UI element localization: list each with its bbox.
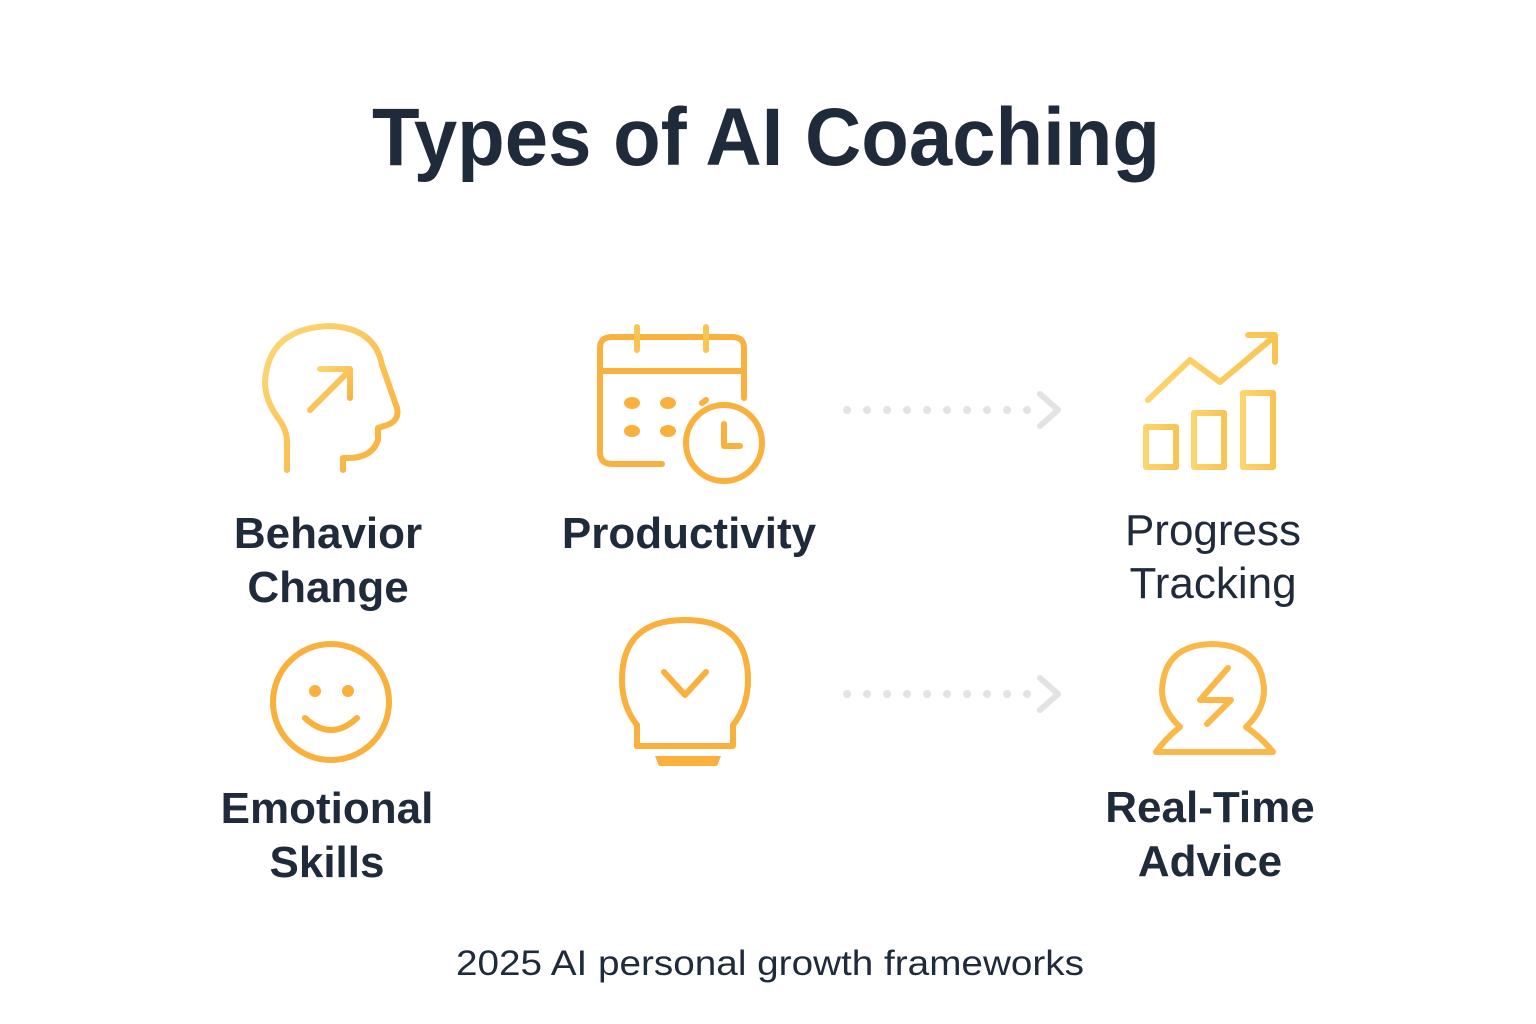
label: Real-Time Advice: Advice bbox=[1138, 837, 1282, 886]
footer caption: 2025 AI personal growth frameworks bbox=[456, 944, 1084, 983]
label: Real-Time Advice: Real-Time bbox=[1105, 783, 1315, 832]
title: Types of AI Coaching bbox=[372, 92, 1160, 183]
icon: light bulb bbox=[622, 620, 748, 766]
icon: smiley (Emotional Skills) bbox=[273, 644, 389, 760]
icon: head with arrow (Behavior Change) bbox=[265, 326, 397, 470]
icon: head with lightning (Real-Time Advice) bbox=[1156, 644, 1273, 752]
label: Emotional Skills: Skills bbox=[270, 838, 384, 887]
arrow: bottom dotted bbox=[843, 678, 1058, 710]
label: Progress Tracking: Tracking bbox=[1129, 559, 1297, 608]
label: Behavior Change: Behavior bbox=[234, 509, 422, 558]
label: Productivity: Productivity bbox=[562, 509, 817, 558]
label: Behavior Change: Change bbox=[247, 563, 409, 612]
label: Progress Tracking: Progress bbox=[1125, 506, 1301, 555]
arrow: top dotted bbox=[843, 394, 1058, 426]
icon: bar chart with trend arrow (Progress Tracking) bbox=[1143, 335, 1286, 467]
icon: calendar with clock (Productivity) bbox=[600, 327, 762, 481]
label: Emotional Skills: Emotional bbox=[221, 784, 433, 833]
